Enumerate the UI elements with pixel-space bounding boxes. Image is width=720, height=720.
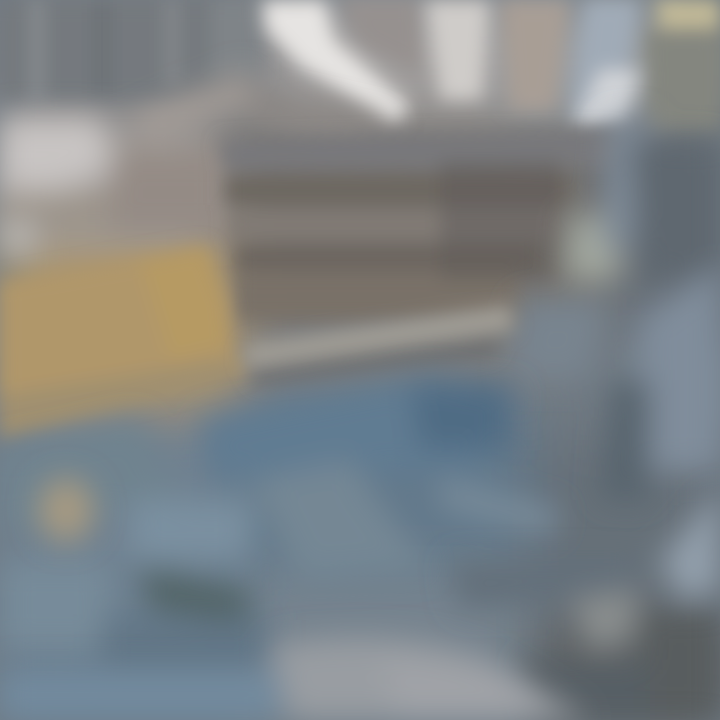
pale bottom sweep [0, 638, 590, 720]
dark horizontal bands [220, 130, 620, 320]
white diagonal beam [262, 0, 720, 130]
pale ledge [245, 305, 515, 385]
grid structure top left [0, 0, 260, 100]
lower right forms [450, 490, 720, 720]
roof and upper left pale shapes [0, 70, 400, 255]
blue lower area [0, 375, 560, 680]
pale column and right side forms [510, 120, 720, 500]
small ochre accent [38, 478, 94, 542]
golden panel [0, 245, 250, 440]
